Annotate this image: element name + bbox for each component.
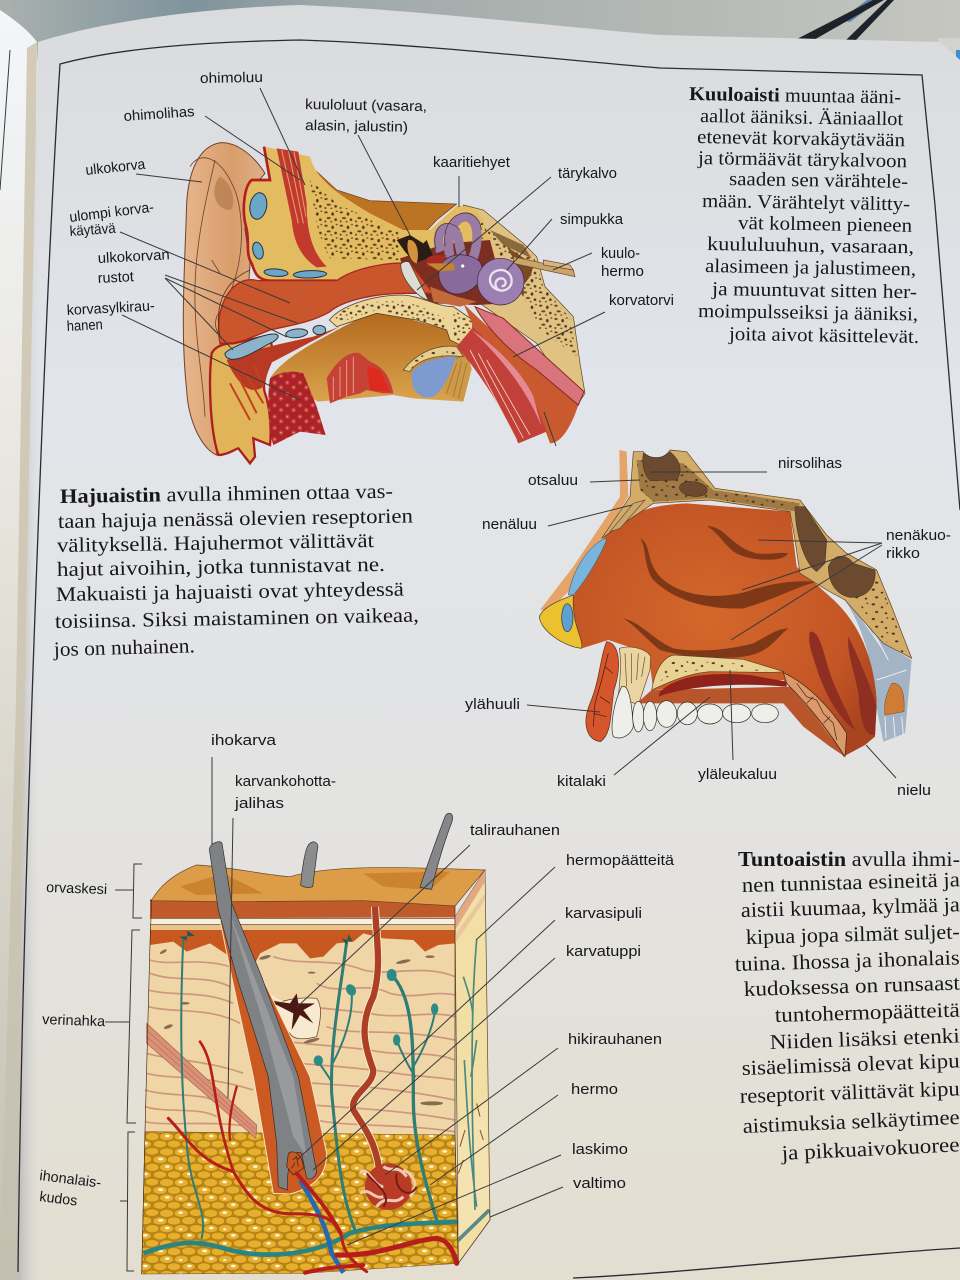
- dermis: [145, 933, 455, 1135]
- text block: Hajuaisti: [53, 481, 419, 661]
- red under palate: [658, 674, 787, 697]
- ear labels: rustot: [97, 269, 134, 287]
- skin labels: jalihas: [234, 796, 284, 812]
- ear labels: kaaritiehyet: [433, 155, 510, 171]
- nose tip: [539, 595, 582, 648]
- text block: Hajuaisti: taan hajuja nenässä olevien reseptorien: [58, 505, 413, 533]
- ear labels: kuulo-: [601, 246, 640, 262]
- nerves: [181, 938, 437, 1238]
- blue cartilage upper: [248, 191, 327, 279]
- side face: [455, 870, 490, 1263]
- dermal fibres: [145, 957, 455, 1132]
- skin labels: karvankohotta-: [235, 774, 336, 790]
- sweat gland: [360, 1163, 417, 1210]
- leader lines: [120, 88, 896, 1245]
- text block: Kuuloaisti: alasimeen ja jalustimeen,: [705, 256, 916, 280]
- ear labels: tärykalvo: [558, 166, 617, 182]
- text block: Tuntoaisti: aistimuksia selkäytimee: [742, 1105, 960, 1138]
- nose labels: kitalaki: [557, 774, 606, 790]
- outer ear (pinna): [183, 143, 265, 455]
- frontal and nasal bones: [602, 450, 912, 658]
- text block: Kuuloaisti: ja muuntuvat sitten her-: [711, 279, 917, 303]
- soft palate: [783, 673, 847, 757]
- hair shaft: [209, 842, 317, 1190]
- temporal bone: [244, 147, 490, 281]
- skin labels: valtimo: [573, 1176, 626, 1192]
- hard palate bone: [652, 655, 784, 690]
- main cartilage / lobe: [210, 335, 273, 463]
- text block: Kuuloaisti: mään. Värähtelyt välitty-: [702, 191, 910, 215]
- skin strip: [540, 450, 628, 610]
- nose labels: otsaluu: [528, 473, 578, 489]
- sweat duct: [353, 907, 380, 1180]
- lower blue cartilage: [225, 325, 326, 359]
- lower bone band: [329, 295, 473, 347]
- text block: Hajuaisti: välityksellä. Hajuhermot välittävät: [57, 530, 374, 557]
- skin labels: ihonalais-: [39, 1168, 102, 1192]
- ear labels: ohimoluu: [200, 70, 263, 87]
- sebaceous gland: [267, 998, 321, 1039]
- block outline: [142, 900, 458, 1274]
- nose labels: nirsolihas: [778, 456, 842, 472]
- text block: Hajuaisti: Hajuaistin avulla ihminen ottaa vas-: [60, 481, 393, 508]
- text block: Tuntoaisti: reseptorit välittävät kipu: [739, 1076, 960, 1108]
- temporal bone speckles: [310, 180, 400, 260]
- skin labels: verinahka: [42, 1012, 106, 1030]
- text block: Kuuloaisti: ja törmäävät tärykalvoon: [697, 148, 907, 172]
- main nasal cavity: [573, 503, 877, 757]
- hypodermis fat: [142, 1132, 458, 1274]
- skin labels: hikirauhanen: [568, 1032, 662, 1048]
- skin labels: hermopäätteitä: [566, 853, 675, 869]
- upper lip: [586, 642, 619, 742]
- ear labels: ohimolihas: [123, 104, 195, 125]
- nose labels: rikko: [886, 546, 920, 562]
- small bone by tube: [403, 346, 463, 372]
- arteries: [168, 1042, 457, 1273]
- nose illustration: [539, 450, 912, 757]
- text block: Kuuloaisti: vät kolmeen pieneen: [738, 213, 912, 237]
- text block: Tuntoaisti: nen tunnistaa esineitä ja: [742, 867, 960, 897]
- nose labels: yläleukaluu: [698, 767, 777, 783]
- vein: [300, 1180, 343, 1273]
- upper gum: [618, 647, 651, 705]
- ear illustration: [183, 143, 585, 463]
- skin labels: [39, 733, 675, 1210]
- text block: Tuntoaisti: [734, 847, 960, 1165]
- text block: Tuntoaisti: Niiden lisäksi etenki: [769, 1023, 960, 1054]
- turbinates: [623, 526, 817, 658]
- skin labels: kudos: [39, 1189, 78, 1210]
- dark tissue behind middle ear: [400, 240, 507, 305]
- orange band above bone: [313, 168, 457, 231]
- left facing page: [0, 10, 40, 1280]
- skin labels: karvatuppi: [566, 944, 641, 960]
- auditory nerve: [513, 257, 575, 277]
- skin labels: hermo: [571, 1082, 618, 1098]
- nose labels: ylähuuli: [465, 697, 520, 713]
- text block: Tuntoaisti: sisäelimissä olevat kipu: [741, 1048, 960, 1080]
- ear labels: korvatorvi: [609, 293, 674, 309]
- main nerve trunk: [143, 1222, 458, 1255]
- page gutter shading: [18, 42, 130, 1280]
- ear labels: hermo: [601, 264, 644, 280]
- text block: Kuuloaisti: saaden sen värähtele-: [729, 169, 908, 193]
- muscles below canal: [327, 353, 393, 403]
- nasal bone detail: [610, 500, 645, 532]
- roof of mouth cavity: [637, 687, 845, 757]
- text block: Kuuloaisti: kuululuuhun, vasaraan,: [707, 234, 914, 258]
- ear canal: [219, 263, 433, 343]
- ear labels: ulkokorva: [85, 157, 147, 179]
- nose labels: [465, 456, 951, 799]
- arrector muscle: [147, 1023, 257, 1138]
- side vessels: [456, 1210, 489, 1243]
- vestibule: [439, 255, 482, 294]
- text block: Tuntoaisti: aistii kuumaa, kylmää ja: [741, 892, 960, 922]
- background behind the book: [0, 0, 960, 80]
- text block: Kuuloaisti: joita aivot käsittelevät.: [728, 324, 919, 348]
- ear labels: alasin, jalustin): [305, 118, 408, 136]
- skin labels: ihokarva: [211, 733, 277, 749]
- temporal muscle: [277, 148, 327, 267]
- ossicles: [397, 235, 433, 263]
- text block: Hajuaisti: toisiinsa. Siksi maistaminen on vaikeaa,: [55, 605, 419, 633]
- semicircular canals: [439, 217, 477, 270]
- text block: Kuuloaisti: Kuuloaisti muuntaa ääni-: [689, 84, 901, 108]
- dermal papillae: [150, 930, 455, 967]
- nose labels: nenäkuo-: [886, 528, 951, 544]
- text block: Kuuloaisti: aallot ääniksi. Ääniaallot: [700, 106, 904, 130]
- skin labels: karvasipuli: [565, 906, 642, 922]
- skin labels: talirauhanen: [470, 823, 560, 839]
- text block: Tuntoaisti: kipua jopa silmät suljet-: [746, 919, 960, 949]
- ear labels: [66, 70, 674, 335]
- text block: Hajuaisti: hajut aivoihin, jotka tunnistavat ne.: [57, 554, 385, 581]
- text block: Hajuaisti: Makuaisti ja hajuaisti ovat yhteydessä: [56, 579, 404, 606]
- spaces under inner ear: [430, 287, 477, 307]
- other hairs: [301, 842, 318, 887]
- text block: Kuuloaisti: moimpulsseiksi ja ääniksi,: [698, 301, 918, 325]
- skin labels: laskimo: [572, 1142, 628, 1158]
- cochlea: [477, 258, 524, 305]
- text block: Tuntoaisti: ja pikkuaivokuoree: [780, 1132, 960, 1165]
- blue cartilage: [412, 357, 457, 397]
- back tissue blue: [845, 600, 912, 742]
- parotid gland: [268, 372, 326, 445]
- nose labels: nenäluu: [482, 517, 537, 533]
- text block: Tuntoaisti: tuina. Ihossa ja ihonalais: [734, 945, 960, 976]
- eustachian tube tissue: [463, 303, 578, 443]
- epidermis layers: [150, 899, 455, 918]
- petrous bone: [457, 205, 585, 405]
- ear labels: ulompi korva-: [69, 200, 155, 226]
- text block: Tuntoaisti: kudoksessa on runsaast: [743, 971, 960, 1001]
- text block: Kuuloaisti: [689, 84, 919, 348]
- ear drum: [401, 262, 428, 300]
- ear labels: käytävä: [69, 221, 117, 240]
- lower orange space: [270, 310, 472, 402]
- hair bulb: [287, 1152, 303, 1175]
- text block: Kuuloaisti: etenevät korvakäytävään: [697, 127, 905, 151]
- nerve endings: [179, 931, 438, 1066]
- follicle: [220, 920, 327, 1194]
- sinuses: [643, 452, 875, 597]
- text block: Tuntoaisti: Tuntoaistin avulla ihmi-: [738, 847, 960, 871]
- skin labels: orvaskesi: [46, 880, 107, 898]
- text block: Hajuaisti: jos on nuhainen.: [53, 635, 195, 661]
- side nerves: [463, 940, 477, 1210]
- ear labels: ulkokorvan: [97, 247, 170, 267]
- ear labels: kuuloluut (vasara,: [305, 97, 427, 115]
- ear labels: korvasylkirau-: [66, 298, 155, 319]
- blue cartilage: [568, 538, 607, 595]
- text block: Tuntoaisti: tuntohermopäätteitä: [774, 997, 960, 1027]
- skin surface: [150, 865, 485, 906]
- skin illustration: [142, 813, 490, 1274]
- teeth: [612, 686, 778, 738]
- nose labels: nielu: [897, 783, 931, 799]
- ear labels: simpukka: [560, 212, 624, 228]
- ear labels: hanen: [66, 317, 103, 335]
- skin layer brackets: [105, 864, 142, 1271]
